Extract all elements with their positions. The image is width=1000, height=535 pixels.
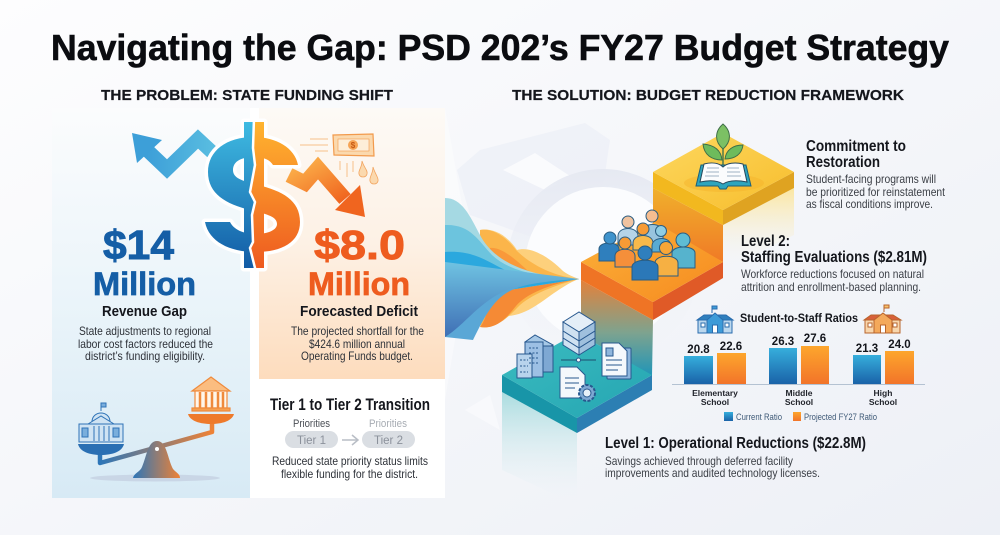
icon: staff group <box>599 210 695 280</box>
staircase: budget reduction framework <box>502 133 794 505</box>
text block: forecasted deficit <box>291 303 424 363</box>
elementary school bars <box>684 341 746 384</box>
middle school bars <box>769 333 829 384</box>
text block: level 2 staffing evaluations: Level 2: <box>741 233 790 250</box>
high school bars: 21.3 <box>856 343 878 355</box>
text block: forecasted deficit: Forecasted Deficit <box>300 303 418 320</box>
text block: tier transition: Reduced state priority status limits <box>272 454 428 468</box>
middle school bars: 27.6 <box>804 333 826 345</box>
category labels: High <box>874 388 892 398</box>
text block: forecasted deficit: Operating Funds budget. <box>301 349 413 363</box>
step: level 2 <box>581 222 723 320</box>
text block: level 1 operational reductions: Savings achieved through deferred facility <box>605 454 793 468</box>
lower orange bands <box>500 279 579 316</box>
category labels: Middle <box>786 388 813 398</box>
icon: capitol building <box>79 403 123 442</box>
legend: Current Ratio <box>736 412 782 423</box>
upper orange bands <box>480 230 579 284</box>
text block: level 1 operational reductions: Level 1: Operational Reductions ($22.8M) <box>605 435 866 452</box>
wall right of restoration step <box>723 188 794 270</box>
blue and teal bands <box>445 198 579 300</box>
elementary school bars: 20.8 <box>687 344 710 356</box>
icon: bank building <box>192 377 230 411</box>
wall below restoration step <box>653 188 723 262</box>
stat: $14 million <box>93 222 196 302</box>
text block: tier transition: Priorities <box>293 418 330 430</box>
text block: commitment to restoration: Student-facing programs will <box>806 172 936 186</box>
text block: commitment to restoration: as fiscal conditions improve. <box>806 197 933 211</box>
blue scale pan <box>78 444 124 455</box>
category labels: School <box>869 397 897 407</box>
text block: tier transition: Tier 1 to Tier 2 Transition <box>270 396 430 414</box>
text block: revenue gap: district’s funding eligibility. <box>85 349 205 363</box>
icon: falling dollar bill <box>300 134 378 184</box>
text block: tier transition: Tier 2 <box>374 435 403 447</box>
high school bars <box>853 339 914 384</box>
elementary school bars: 22.6 <box>720 341 742 353</box>
legend <box>724 412 877 423</box>
icon: orange school <box>864 305 901 333</box>
icon: server stack <box>561 312 596 362</box>
text block: level 2 staffing evaluations: Workforce reductions focused on natural <box>741 267 924 281</box>
panel: right column background <box>250 108 445 498</box>
text block: level 2 staffing evaluations <box>741 233 927 294</box>
text block: level 1 operational reductions <box>605 435 866 480</box>
category labels: School <box>701 397 729 407</box>
stat: $8.0 million <box>308 222 410 302</box>
text block: tier transition: Priorities <box>369 418 407 430</box>
text block: forecasted deficit: $424.6 million annual <box>309 337 405 351</box>
text block: level 2 staffing evaluations: attrition and enrollment-based planning. <box>741 280 921 294</box>
text block: tier transition <box>270 396 430 481</box>
icon: blue school <box>697 306 733 333</box>
text block: commitment to restoration: be prioritized for reinstatement <box>806 185 946 199</box>
panel: the problem <box>52 108 445 498</box>
heading: the solution: THE SOLUTION: BUDGET REDUCTION FRAMEWORK <box>512 87 904 104</box>
category labels <box>692 388 897 407</box>
category labels: Elementary <box>692 388 738 398</box>
icon: office buildings <box>517 335 553 378</box>
step: restoration <box>653 133 794 225</box>
trend arrow: blue rising <box>132 133 212 169</box>
text block: tier transition: Tier 1 <box>297 435 326 447</box>
icon: book and plant <box>684 124 764 192</box>
stat: $8.0 million: $8.0 <box>314 222 405 268</box>
heading: the problem: THE PROBLEM: STATE FUNDING SHIFT <box>101 87 393 104</box>
text block: forecasted deficit: The projected shortfall for the <box>291 324 424 338</box>
text block: tier transition: flexible funding for the district. <box>281 467 418 481</box>
text block: revenue gap <box>78 303 213 363</box>
chart: student-to-staff ratios <box>672 305 925 423</box>
icon: audited documents <box>602 343 631 379</box>
text block: commitment to restoration: Restoration <box>806 154 880 171</box>
icon: seesaw scale with capitol and bank <box>78 377 234 482</box>
dollar white halo <box>205 122 300 268</box>
icon: document with gear <box>560 367 595 401</box>
text block: revenue gap: labor cost factors reduced the <box>78 337 213 351</box>
stat: $14 million: $14 <box>103 222 174 268</box>
icon: split dollar sign <box>205 118 300 272</box>
step: level 1 <box>502 333 652 433</box>
middle school bars: 26.3 <box>772 336 794 348</box>
title: Navigating the Gap: PSD 202’s FY27 Budget Strategy <box>51 27 949 68</box>
text block: commitment to restoration <box>806 138 946 211</box>
text block: commitment to restoration: Commitment to <box>806 138 906 155</box>
category labels: School <box>785 397 813 407</box>
seesaw beam <box>100 420 212 463</box>
arrow: tier 1 to tier 2 <box>342 435 358 445</box>
background decoration: faint circle and shapes <box>445 108 699 430</box>
pill: tier 1 <box>285 431 338 448</box>
seesaw fulcrum <box>133 441 180 478</box>
panel: forecasted deficit background <box>259 108 445 379</box>
text block: level 1 operational reductions: improvements and audited technology licenses. <box>605 466 820 480</box>
stat: $8.0 million: Million <box>308 266 410 302</box>
flow swoosh converging to the framework <box>445 198 579 340</box>
text block: level 2 staffing evaluations: Staffing Evaluations ($2.81M) <box>741 249 927 266</box>
wall below level 2 <box>581 280 653 376</box>
orange scale pan <box>188 414 234 424</box>
chart title: Student-to-Staff Ratios <box>740 313 858 325</box>
trend arrow: orange falling <box>289 168 365 217</box>
stat: $14 million: Million <box>93 266 196 302</box>
panel: revenue gap background <box>52 108 250 498</box>
icon: falling dollar bill: $ <box>351 141 356 150</box>
text block: revenue gap: State adjustments to regional <box>79 324 211 338</box>
high school bars: 24.0 <box>888 339 911 351</box>
text block: revenue gap: Revenue Gap <box>102 303 187 320</box>
legend: Projected FY27 Ratio <box>804 412 877 423</box>
wall under level 1 <box>502 392 577 505</box>
pill: tier 2 <box>362 431 415 448</box>
